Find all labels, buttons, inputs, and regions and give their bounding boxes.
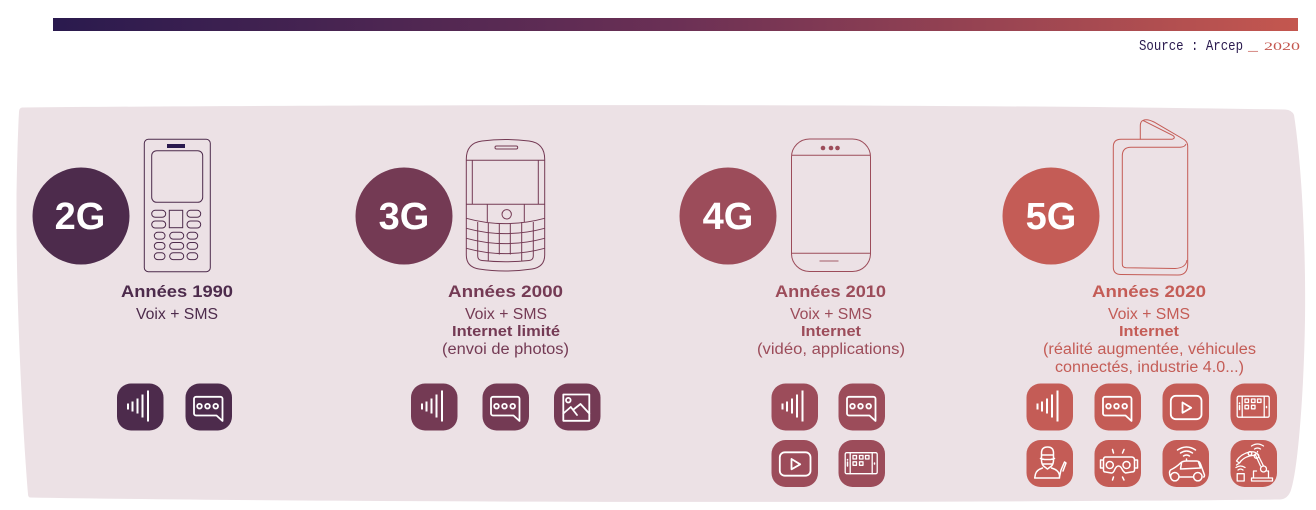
text: 4G description (757, 282, 905, 358)
badge: 2G: 2G (55, 196, 105, 238)
text: 4G description: Voix + SMS (790, 306, 872, 323)
text: 3G description: (envoi de photos) (442, 341, 569, 358)
badge: 5G (1002, 168, 1100, 264)
text: 5G description (1043, 282, 1256, 376)
icon tiles: 3G (411, 384, 600, 430)
text: 2G description: Années 1990 (121, 282, 233, 301)
source credit: _ (1247, 39, 1258, 55)
icon tiles: 2G (117, 384, 232, 430)
icon: industrial robot (1230, 440, 1277, 487)
icon: basic phone (144, 139, 210, 272)
text: 5G description: Internet (1119, 323, 1179, 340)
icon: touchscreen smartphone (792, 139, 870, 272)
icon: connected car (1162, 440, 1209, 487)
text: 4G description: (vidéo, applications) (757, 341, 905, 358)
text: 3G description (442, 282, 569, 358)
badge: 2G (32, 168, 130, 264)
source credit: Source : Arcep (1139, 39, 1243, 55)
panel: 5G (1002, 120, 1277, 487)
icon tiles: 4G (772, 384, 885, 487)
top gradient bar (53, 18, 1298, 31)
text: 5G description: Voix + SMS (1108, 306, 1190, 323)
panel: 2G (32, 139, 233, 431)
badge: 3G: 3G (379, 196, 429, 238)
text: 2G description (121, 282, 233, 323)
icon: VR headset (1094, 440, 1141, 487)
badge: 3G (356, 168, 452, 264)
badge: 5G: 5G (1026, 196, 1076, 238)
icon tiles: 5G (1026, 384, 1277, 487)
text: 5G description: connectés, industrie 4.0...) (1055, 359, 1244, 376)
panel: 4G (680, 139, 905, 487)
text: 3G description: Voix + SMS (465, 306, 547, 323)
text: 3G description: Années 2000 (448, 282, 563, 301)
icon: AR surgeon (1026, 440, 1073, 487)
source credit: 2020 (1264, 39, 1300, 53)
text: 2G description: Voix + SMS (136, 306, 218, 323)
icon: foldable phone (1113, 120, 1188, 275)
text: 3G description: Internet limité (452, 323, 560, 340)
panel: 3G (356, 140, 600, 430)
background panel (16, 105, 1305, 502)
badge: 4G: 4G (703, 196, 753, 238)
text: 4G description: Internet (801, 323, 861, 340)
badge: 4G (680, 168, 776, 264)
text: 5G description: Années 2020 (1092, 282, 1206, 301)
text: 4G description: Années 2010 (775, 282, 886, 301)
text: 5G description: (réalité augmentée, véhicules (1043, 341, 1256, 358)
icon: keyboard smartphone (466, 140, 545, 271)
